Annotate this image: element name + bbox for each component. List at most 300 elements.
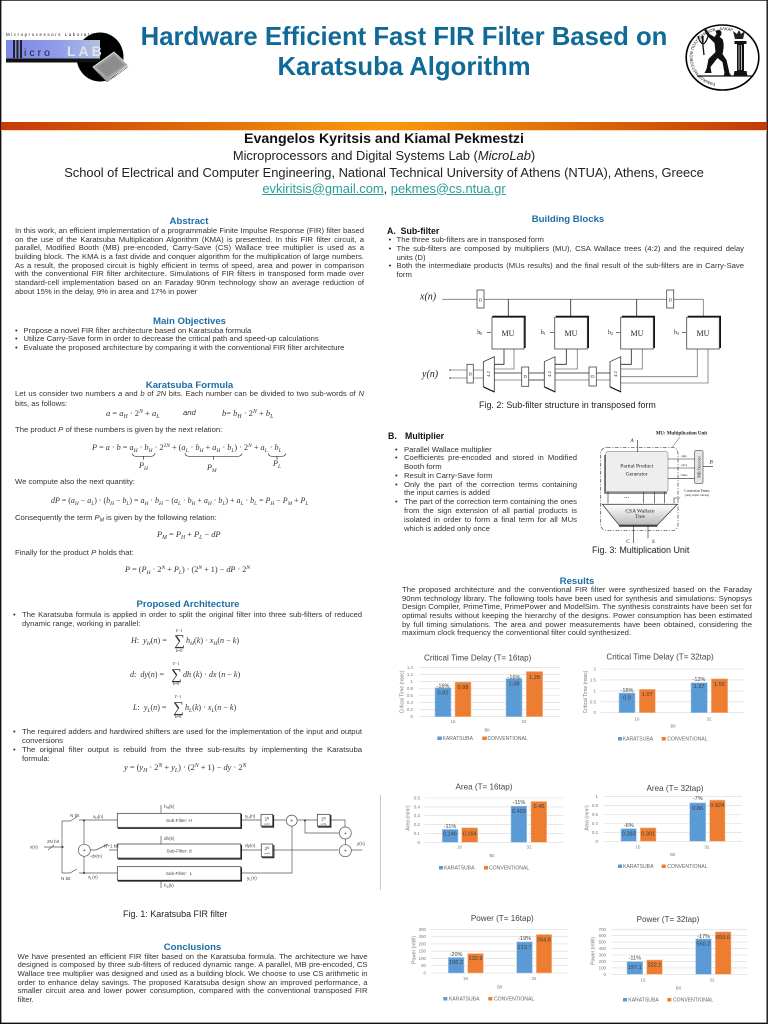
Fig. 1: Karatsuba FIR filter diagram: L [90,876,92,880]
chart: Critical Time Delay 32 tap: Critical Time Delay (T= 32tap) [606,652,714,662]
chart: Critical Time Delay 32 tap: 1 [594,688,597,693]
chart: Critical Time Delay 16 tap: 0.98 [458,685,468,691]
chart: Area 16 tap: 0.164 [463,832,477,838]
chart: Area 32 tap: 0.4 [592,821,599,826]
chart: Power 16 tap: 16 [463,976,468,981]
panel: Karatsuba formula: b= bH · 2N + bL [222,408,273,420]
panel: main objectives [15,316,344,352]
chart: Critical Time Delay 16 tap: 0.6 [407,693,414,698]
authors and affiliation: Evangelos Kyritsis and Kiamal Pekmestzi [244,131,524,147]
panel: multiplier: Result in Carry-Save form [404,471,492,480]
chart: Power 32 tap: Power (T= 32tap) [637,915,700,924]
authors and affiliation [64,131,704,196]
panel: building blocks: Both the intermediate products (MUs results) and the final result of the sub-filters are in Carry-Save [396,261,744,270]
panel: Karatsuba formula: dP = (aH − aL) · (bH − bL) = aH · bH − (aL · bH + aH · bL) + aL · bL = PH − PM + PL [51,496,308,507]
chart: Critical Time Delay 32 tap: Critical Time (nsec) [583,670,589,713]
panel: proposed architecture: hH(k) · xH(n − k) [186,636,239,647]
Fig. 3: Multiplication unit diagram: carry [681,463,688,467]
panel: conclusions: smaller circuit area and lower power consumption, compared with the conventional transposed FIR [18,986,368,995]
Fig. 2: Sub-filter structure diagram: y(n) [421,369,439,380]
Fig. 2: Sub-filter structure diagram: 4:2 [547,371,552,377]
panel: abstract: with the conventional FIR filter architecture. Simulations of FIR filters in transposed form made over [15,269,364,278]
panel: Karatsuba formula: Karatsuba Formula [146,380,233,391]
panel: proposed architecture: y = (yH · 2N + yL) · (2N + 1) − dy · 2N [124,763,246,774]
panel: abstract: on the use of the Karatsuba Multiplication Algorithm (KMA) is presented. In this FIR filter circuit, a [15,235,364,244]
Fig. 1: Karatsuba FIR filter diagram: N bit [70,813,80,818]
Fig. 1: Karatsuba FIR filter diagram: y [245,814,247,818]
Fig. 1: Karatsuba FIR filter diagram: 2ᴺ [321,816,326,822]
panel: results: by full timing simulations. The area and power measurements have been obtained, considering the [402,620,752,629]
Fig. 3: Multiplication unit diagram: A [629,438,634,444]
Fig. 2: Sub-filter structure diagram: 4:2 [486,371,491,377]
chart: Power 32 tap: 32 [710,978,715,982]
Fig. 3: Multiplication unit diagram: ... [624,492,630,500]
chart: Area 32 tap: KARATSUBA [623,864,654,870]
panel: main objectives: • [15,334,18,343]
panel: results: optimal results without keeping the hierarchy of the designs. Power consumption has been estimated [402,611,752,620]
chart: Critical Time Delay 32 tap: -16% [620,688,634,694]
panel: main objectives: Utilize Carry-Save form in order to decrease the critical path and speed-up calculations [24,334,319,343]
chart: Area 32 tap: 0.283 [622,832,636,838]
Fig. 1: Karatsuba FIR filter diagram: L [167,885,169,889]
chart: Area 16 tap: 0.146 [443,832,457,838]
Fig. 1: Karatsuba FIR filter diagram: h [164,804,167,809]
Fig. 3: Multiplication unit diagram: CSA Wallace [625,508,655,514]
chart: Power 16 tap: 200 [419,941,427,946]
panel: proposed architecture: The Karatsuba formula is applied in order to split the original filter into three sub-filters of reduced [22,610,362,619]
panel: conclusions: We have presented an efficient FIR filter based on the Karatsuba formula. The architecture we have [18,952,368,961]
chart: Power 16 tap: CONVENTIONAL [494,996,534,1002]
Fig. 2: Sub-filter structure diagram: D [669,297,673,302]
title: Hardware Efficient Fast FIR Filter Based on [141,23,667,51]
Fig. 1: Karatsuba FIR filter diagram: y [247,876,249,880]
Fig. 1: Karatsuba FIR filter diagram: x [88,874,90,880]
Fig. 2: Sub-filter structure diagram: D [591,374,595,379]
Fig. 2: Sub-filter structure diagram: MU [502,329,515,338]
panel: proposed architecture: • [13,610,16,619]
Fig. 1: Karatsuba FIR filter diagram: Sub-Filter: L [166,871,193,876]
chart: Critical Time Delay 32 tap: 1.37 [694,684,704,690]
chart: Critical Time Delay 16 tap [400,654,560,742]
panel: proposed architecture: ∑ [173,700,184,716]
chart: Area 16 tap: -11% [444,824,456,830]
chart: Area 32 tap: 16 [636,844,641,850]
Fig. 3: Multiplication unit diagram: C [626,539,630,545]
chart: Critical Time Delay 16 tap: 1.4 [407,665,414,670]
chart: Area 32 tap: 32 [705,844,710,850]
panel: multiplier: from the sign extension of all partial products is [404,506,577,515]
Fig. 1: Karatsuba FIR filter diagram: (k) [169,804,175,809]
panel: Karatsuba formula: Let us consider two numbers a and b of 2N bits. Each number can be divided to two sub-words of N [15,389,364,398]
panel: proposed architecture: T−1 [172,661,180,666]
Fig. 3: Multiplication unit diagram: B [709,460,713,466]
panel: multiplier: • [395,471,398,480]
Fig. 2: Sub-filter structure diagram: 4:2 [613,371,618,377]
chart: Power 32 tap: 700 [599,927,607,932]
panel: multiplier: • [395,480,398,489]
panel: abstract: Abstract [170,216,208,227]
panel: proposed architecture: The original filter output is rebuild from the three sub-results by implementing the Karatsuba [22,745,362,754]
chart: Area 16 tap: 16 [457,844,462,850]
chart: Area 16 tap: KARATSUBA [444,866,475,872]
panel: main objectives: • [15,343,18,352]
header band [1,122,767,131]
panel: proposed architecture: hL(k) · xL(n − k) [185,703,236,714]
chart: Critical Time Delay 16 tap: -16% [507,675,521,681]
Fig. 3: Multiplication unit diagram: MB Decoder [696,456,701,478]
Fig. 1: Karatsuba FIR filter diagram: N+1 bit [104,844,119,848]
chart: Critical Time Delay 32 tap [583,652,745,742]
chart: Critical Time Delay 32 tap: 2 [594,666,597,672]
Fig. 1: Karatsuba FIR filter diagram [30,795,380,890]
chart: Critical Time Delay 16 tap: KARATSUBA [442,736,474,742]
chart: Area 32 tap: 1 [596,794,599,799]
panel: proposed architecture: k=0 [175,714,181,719]
chart: Power 32 tap: 600 [599,933,607,938]
chart: Power 16 tap: 0 [424,970,427,976]
chart: Power 16 tap: Bit [497,984,503,990]
panel: results: The proposed architecture and the conventional FIR filter were synthesized based on the Faraday [402,585,752,594]
chart: Critical Time Delay 32 tap: 16 [635,716,640,722]
chart: Power 32 tap: 222.1 [648,962,662,968]
chart: Critical Time Delay 16 tap: 0.8 [407,686,414,691]
chart: Area 16 tap: -11% [513,800,525,806]
chart: Power 32 tap: 659.6 [716,935,730,941]
chart: Power 32 tap: -11% [628,956,641,962]
chart: Critical Time Delay 32 tap: 1.07 [642,692,653,698]
Fig. 1: Karatsuba FIR filter diagram: (n) [92,874,98,880]
chart: Area 16 tap: CONVENTIONAL [489,866,529,872]
chart: Critical Time Delay 16 tap: Critical Time Delay (T= 16tap) [424,654,532,662]
logo: MicroLAB: icro [24,47,53,59]
chart: Area 32 tap: 0.8 [592,803,599,808]
panel: multiplier: B. [388,431,397,441]
chart: Power 32 tap: Power (mW) [590,937,596,965]
panel: results [402,576,752,637]
panel: building blocks [387,214,744,279]
panel: proposed architecture: L: yL(n) = [133,703,167,714]
panel: multiplier: Multiplier [405,431,444,441]
chart: Critical Time Delay 16 tap: 0.82 [438,691,448,697]
chart: Power 16 tap: Power (T= 16tap) [471,914,534,923]
chart: Area 32 tap: 0.2 [592,830,599,835]
chart: Critical Time Delay 32 tap: CONVENTIONAL [667,736,708,742]
Fig. 1: Karatsuba FIR filter diagram: (n) [251,876,257,880]
authors and affiliation: School of Electrical and Computer Engineering, National Technical University of Athens (NTUA), Athens, Greece [64,164,704,180]
Fig. 1: Karatsuba FIR filter diagram: (k) [168,883,174,888]
Fig. 2: Sub-filter structure diagram: MU [697,329,710,338]
panel: Karatsuba formula: and [183,408,196,417]
chart: Power 32 tap: 100 [599,965,607,970]
chart: Critical Time Delay 16 tap: Bit [484,728,490,732]
Fig. 1: Karatsuba FIR filter diagram: H [247,816,250,820]
Fig. 1: Karatsuba FIR filter diagram: Sub-Filter: H [166,818,192,823]
Fig. 2: Sub-filter structure diagram: x(n) [419,292,437,302]
chart: Critical Time Delay 32 tap: 0.5 [590,699,597,704]
chart: Critical Time Delay 16 tap: 0.4 [407,700,414,705]
panel: Karatsuba formula: P = a · b = aH · bH · 22N + (aL · bH + aH · bL) · 2N + aL · bL [92,443,282,454]
panel: building blocks: units (D) [396,253,426,262]
chart: Critical Time Delay 32 tap: 32 [707,716,712,722]
panel: conclusions: Wallace tree multiplier was designed and used as a building block. We choose to use CS arithmetic in [18,969,368,978]
panel: proposed architecture: T−1 [174,694,182,699]
panel: proposed architecture: dynamic range, working in parallel: [22,619,140,628]
chart: Critical Time Delay 16 tap: 1.2 [407,672,414,677]
panel: Karatsuba formula: PM = PH + PL − dP [157,530,221,541]
panel: Karatsuba formula: PM [207,462,217,473]
panel: conclusions [18,942,368,1004]
Fig. 2: Sub-filter structure diagram: D [524,374,528,379]
panel: multiplier: Only the part of the correction terms containing [404,480,577,489]
panel: proposed architecture: conversions [22,736,63,745]
panel: multiplier: Parallel Wallace multiplier [404,445,492,454]
Fig. 3: Multiplication unit diagram [601,432,713,545]
Fig. 3: Multiplication unit diagram: Correction Terms [684,489,710,493]
chart: Critical Time Delay 16 tap: 1.28 [529,675,540,681]
chart: Power 32 tap: CONVENTIONAL [673,997,713,1003]
chart: Area 16 tap: 32 [527,844,532,850]
panel: multiplier: • [395,497,398,506]
Fig. 1: Karatsuba FIR filter diagram: Sub-Filter: d [166,848,192,854]
Fig. 1: Karatsuba FIR filter diagram: 2ᴺ [265,816,269,822]
panel: proposed architecture: T−1 [175,628,183,633]
chart: Area 32 tap: -6% [624,823,634,829]
chart: Power 32 tap [590,915,747,1003]
authors and affiliation: Microprocessors and Digital Systems Lab (MicroLab) [233,148,535,163]
Fig. 2: Sub-filter structure diagram: h [477,330,480,336]
logo: MicroLAB: LAB [67,43,105,59]
chart: Power 32 tap: 197.1 [628,965,642,971]
panel: Karatsuba formula: Consequently the term PM is given by the following relation: [15,513,217,523]
panel: results: Results [560,576,594,586]
panel: multiplier [388,431,577,533]
panel: Karatsuba formula: The product P of these numbers is given by the next relation: [15,425,222,434]
panel: proposed architecture: • [13,745,16,754]
chart: Power 16 tap: 150 [419,949,427,954]
chart: Area 16 tap: 0 [418,840,421,845]
panel: results: Design Compiler, PrimeTime, PrimePower and ModelSim. The synthesis constraints have been set for [402,602,752,611]
panel: building blocks: The three sub-filters are in transposed form [396,235,544,244]
Fig. 1: Karatsuba FIR filter diagram: 2N bit [47,839,60,844]
chart: Area 32 tap: 0.924 [710,803,724,809]
panel: results: 90nm technology library. The following tools have been used for synthesis and simulations: Synopsys [402,594,752,603]
Fig. 2: Sub-filter structure diagram: h [541,330,544,336]
Fig. 3: Multiplication unit diagram: value [681,473,688,477]
panel: building blocks: Building Blocks [532,214,604,225]
panel: main objectives: • [15,326,18,335]
panel: proposed architecture: k=0 [176,648,182,653]
panel: abstract: about 15% in the delay, 9% in area and 17% in power [15,287,197,296]
panel: proposed architecture: ∑ [174,633,185,649]
chart: Critical Time Delay 16 tap: 0 [411,714,414,719]
chart: Critical Time Delay 32 tap: KARATSUBA [623,736,654,742]
Fig. 1: Karatsuba FIR filter diagram: y(n) [357,841,365,846]
logo: MicroLAB [6,32,128,82]
chart: Critical Time Delay 16 tap: -16% [436,684,450,690]
chart: Power 16 tap: 32 [532,976,537,981]
Fig. 2: Sub-filter structure diagram: 1 [544,331,546,336]
panel: Karatsuba formula: We compute also the next quantity: [15,477,135,486]
panel: multiplier: Coefficients pre-encoded and stored in Modified [404,453,577,462]
caption: Fig. 2: Fig. 2: Sub-filter structure in transposed form [479,400,656,410]
caption: Fig. 1: Fig. 1: Karatsuba FIR filter [123,908,227,918]
chart: Power 32 tap: 0 [604,972,607,977]
panel: proposed architecture [13,599,362,774]
chart: Power 16 tap: 300 [419,927,427,932]
panel: conclusions: Conclusions [164,942,221,952]
chart: Power 16 tap: 50 [421,963,427,968]
panel: proposed architecture: The required adders and hardwired shifters are used for the implementation of the input and output [22,727,362,736]
chart: Power 32 tap: 200 [599,959,607,964]
panel: multiplier: which is added only once [404,524,490,533]
chart: Power 32 tap: 300 [599,952,607,958]
chart: Critical Time Delay 16 tap: Critical Time (nsec) [400,670,406,713]
panel: proposed architecture: ∑ [171,667,182,683]
chart: Critical Time Delay 32 tap: 1.55 [714,682,725,688]
panel: proposed architecture: • [13,727,16,736]
Fig. 1: Karatsuba FIR filter diagram: x [93,814,95,819]
Fig. 3: Multiplication unit diagram: Generator [626,472,648,478]
logo: NTUA seal: ΕΘΝΙΚΟΝ ΜΕΤΣΟΒΙΟΝ ΠΟΛΥΤΕΧΝΕΙΟΝ · ΑΛΚΑΡ [690,27,733,86]
panel: multiplier: The part of the correction term containing the ones [404,497,577,506]
title [141,23,667,80]
chart: Area 32 tap: CONVENTIONAL [667,864,708,870]
chart: Critical Time Delay 16 tap: CONVENTIONAL [488,736,528,742]
chart: Area 16 tap: Bit [489,853,495,858]
panel: multiplier: Booth form [404,462,442,471]
Fig. 1: Karatsuba FIR filter diagram: N bit [61,876,71,881]
panel: Karatsuba formula: PL [273,459,281,470]
chart: Power 32 tap: KARATSUBA [628,997,659,1003]
chart: Power 32 tap: -17% [697,934,710,940]
panel: building blocks: A. Sub-filter [387,226,439,236]
Fig. 1: Karatsuba FIR filter diagram: + [344,831,347,837]
Fig. 1: Karatsuba FIR filter diagram: 2ᴺ [265,846,269,851]
chart: Critical Time Delay 16 tap: 32 [522,719,527,724]
Fig. 2: Sub-filter structure diagram: D [469,372,473,376]
panel: Karatsuba formula: PH [139,461,148,472]
chart: Area 32 tap: 0.86 [692,806,703,812]
chart: Critical Time Delay 32 tap: Bit [670,724,676,728]
Fig. 2: Sub-filter structure diagram: MU [631,329,644,338]
Fig. 1: Karatsuba FIR filter diagram: x=N [321,822,326,826]
chart: Area 16 tap: 0.1 [414,831,421,836]
panel: abstract [15,216,364,296]
chart: Area 16 tap: 0.2 [414,822,421,827]
panel: building blocks: form [396,270,412,279]
Fig. 2: Sub-filter structure diagram: 3 [677,331,679,336]
logo: MicroLAB: Microprocessors Laboratory [6,32,101,37]
panel: abstract: standard-cell implementation based on an Faraday 90nm technology show an average reduction of [15,278,364,287]
panel: proposed architecture: d: dy(n) = [130,670,164,679]
panel: abstract: building block. The KMA is a fast divide and conquer algorithm for the multiplication of large numbers. [15,252,364,261]
Fig. 1: Karatsuba FIR filter diagram: x=N [264,822,270,826]
panel: building blocks: • [389,244,391,253]
chart: Critical Time Delay 16 tap: 16 [451,719,456,724]
Fig. 1: Karatsuba FIR filter diagram: -dx(n) [90,854,102,858]
chart: Critical Time Delay 16 tap: 0.2 [407,707,414,712]
chart: Area 32 tap: -7% [693,796,703,802]
Fig. 3: Multiplication unit diagram: sign [681,454,687,458]
panel: building blocks: The sub-filters are composed by multipliers (MU), CSA Wallace trees (4:2) and the required delay [396,244,744,253]
Fig. 1: Karatsuba FIR filter diagram: H [167,806,170,810]
chart: Area 32 tap: Area (T= 32tap) [647,784,704,793]
chart: Power 16 tap [412,914,568,1002]
panel: conclusions: filter. [18,995,34,1004]
chart: Area 16 tap: 0.4 [414,804,421,809]
panel: proposed architecture: k=0 [173,681,179,686]
chart: Power 32 tap: 400 [599,946,607,951]
chart: Area 16 tap: 0.46 [534,804,544,810]
panel: multiplier: isolated in order to form a final term for all MUs [404,515,577,524]
panel: Karatsuba formula: bits, as follows: [15,399,67,408]
Fig. 2: Sub-filter structure diagram: MU [565,329,578,338]
authors and affiliation: evkiritsis@gmail.com, pekmes@cs.ntua.gr [262,180,506,196]
panel: abstract: parallel, Modified Booth (MB) pre-encoded, Carry-Save (CS) Wallace tree multiplier is used as a [15,243,364,252]
chart: Area 32 tap [584,784,742,870]
Fig. 3: Multiplication unit diagram: MU: Multiplication Unit [656,432,708,436]
Fig. 2: Sub-filter structure diagram: 2 [611,331,613,336]
Fig. 1: Karatsuba FIR filter diagram: x=N [264,852,270,856]
Fig. 2: Sub-filter structure diagram: D [479,297,483,302]
chart: Power 16 tap: 250 [419,934,427,939]
chart: Area 32 tap: Bit [670,852,676,857]
panel: abstract: In this work, an efficient implementation of a programmable Finite Impulse Response (FIR) filter based [15,226,364,235]
Fig. 1: Karatsuba FIR filter diagram: + [290,818,293,824]
Fig. 3: Multiplication unit diagram: Partial Product [620,464,654,470]
panel: results: maximum clock frequency the conventional filter could synthesized. [402,628,631,637]
Fig. 2: Sub-filter structure diagram [419,290,720,392]
title: Karatsuba Algorithm [277,52,531,80]
chart: Area 16 tap: 0.3 [414,813,421,818]
Fig. 1: Karatsuba FIR filter diagram: + [83,848,86,854]
panel: building blocks: • [389,235,391,244]
panel: proposed architecture: H: yH(n) = [131,636,167,647]
chart: Power 32 tap: 550.2 [696,942,710,948]
chart: Power 16 tap: 100 [419,956,427,961]
panel: Karatsuba formula [15,380,364,576]
Fig. 1: Karatsuba FIR filter diagram: dy(n) [245,843,256,848]
logo: NTUA seal [685,24,760,91]
Fig. 3: Multiplication unit diagram: (only input carries) [685,493,709,497]
panel: main objectives: Propose a novel FIR filter architecture based on Karatsuba formula [24,326,251,335]
chart: Power 16 tap: -20% [449,952,463,958]
chart: Critical Time Delay 32 tap: -12% [692,677,706,683]
panel: proposed architecture: Proposed Architecture [136,599,240,610]
panel: Karatsuba formula: P = (PH · 2N + PL) · (2N + 1) − dP · 2N [125,565,250,576]
panel: Karatsuba formula: a = aH · 2N + aL [106,408,159,420]
Fig. 1: Karatsuba FIR filter diagram: L [249,878,251,882]
Fig. 2: Sub-filter structure diagram: 0 [480,331,482,336]
Fig. 1: Karatsuba FIR filter diagram: dh(k) [164,836,175,841]
chart: Power 16 tap: 213.7 [518,945,532,951]
chart: Power 16 tap: 132.9 [468,956,482,962]
chart: Power 32 tap: Bit [676,986,682,990]
chart: Critical Time Delay 32 tap: 0 [594,710,597,715]
panel: main objectives: Main Objectives [153,316,226,326]
Fig. 2: Sub-filter structure diagram: h [674,330,677,336]
chart: Area 32 tap: 0.301 [641,832,655,838]
panel: multiplier: • [395,453,398,462]
panel: multiplier: • [395,445,398,454]
panel: abstract: As a result, the proposed circuit is highly efficient in terms of speed, area and power in comparison [15,261,364,270]
panel: conclusions: order to enhance delay savings. The proposed Karatsuba design show an improved performance, a [18,978,368,987]
chart: Area 16 tap: Area (T= 16tap) [456,782,513,792]
chart: Critical Time Delay 16 tap: 1 [411,679,414,684]
chart: Critical Time Delay 32 tap: 1.5 [590,677,597,682]
Fig. 1: Karatsuba FIR filter diagram: h [164,883,167,888]
chart: Power 16 tap: 264.6 [537,938,551,944]
